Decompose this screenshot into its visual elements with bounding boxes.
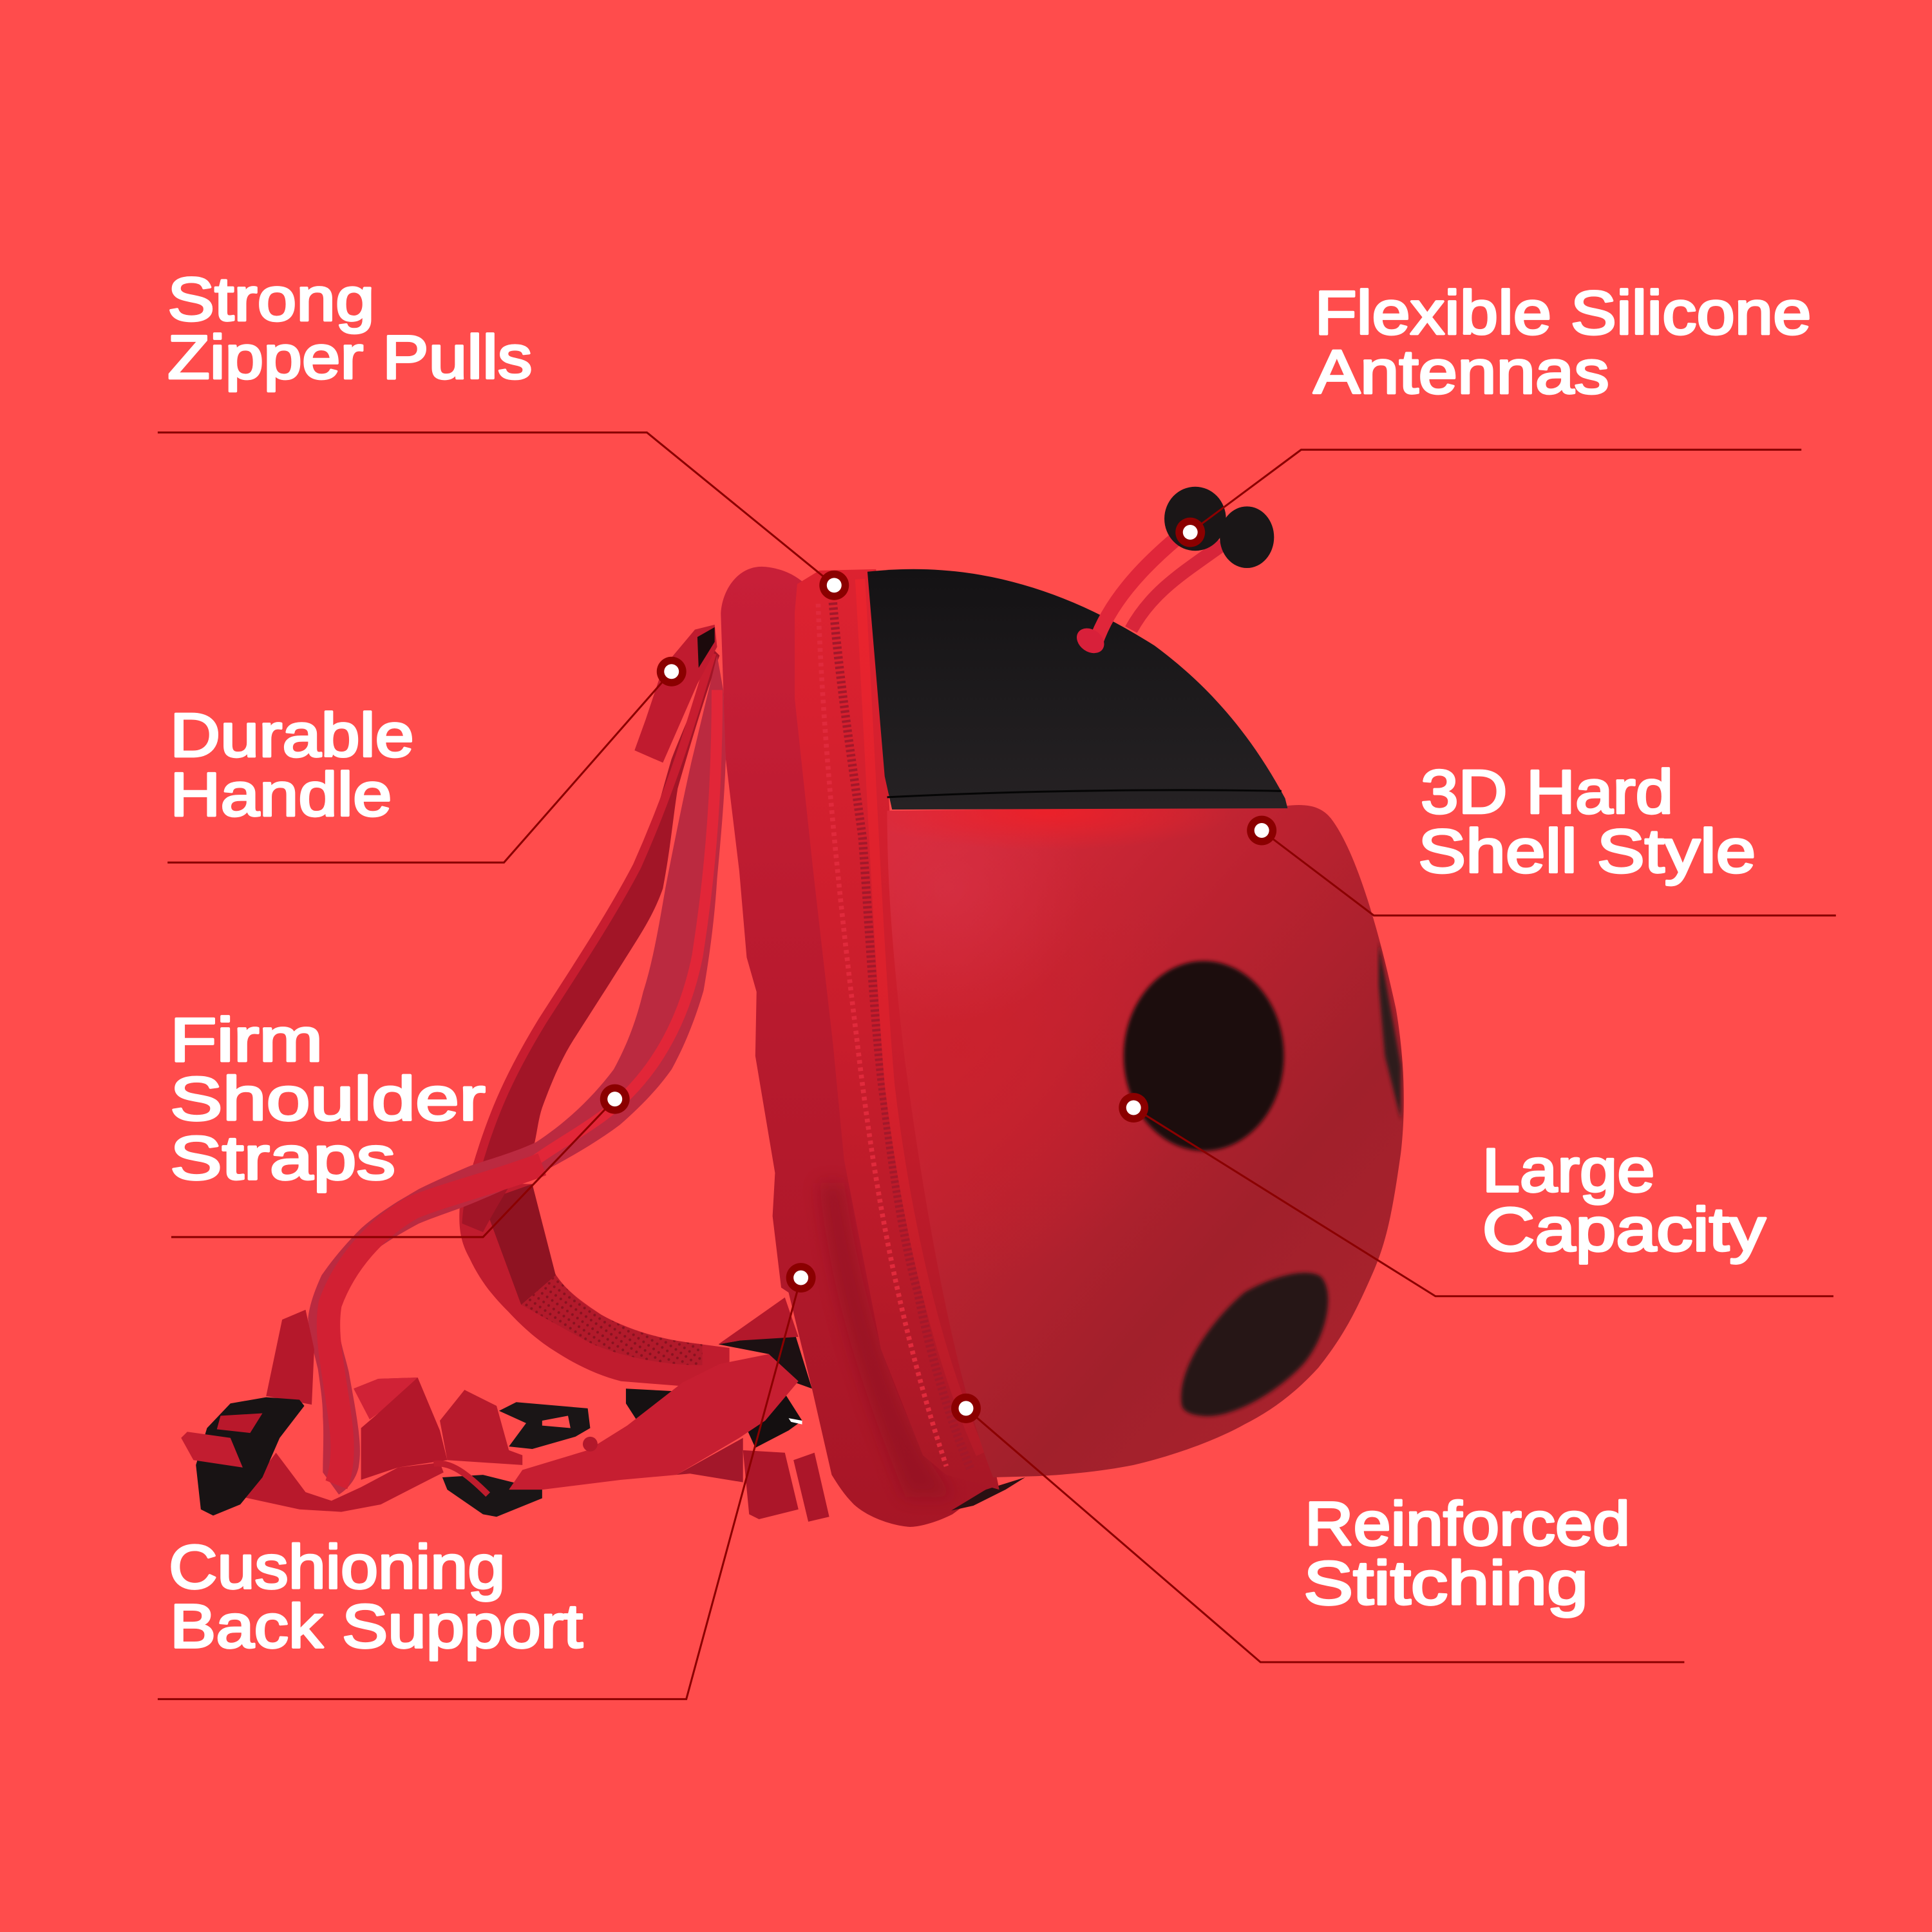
- leader line: cushioning back support: [158, 1278, 801, 1699]
- left buckle: [181, 1397, 305, 1515]
- marker: stitching: [951, 1394, 981, 1423]
- bottom buckle: [433, 1463, 542, 1517]
- label: Reinforced Stitching: [1303, 1490, 1630, 1618]
- diagonal lower strap: [509, 1354, 799, 1490]
- label: Reinforced Stitching: Stitching: [1303, 1549, 1588, 1618]
- label: Large Capacity: [1482, 1136, 1766, 1264]
- dark hardware behind strap: [626, 1333, 812, 1421]
- leader line: strong zipper pulls: [158, 433, 834, 585]
- rear strap outer: [462, 650, 719, 1232]
- marker: shoulder straps: [600, 1084, 630, 1114]
- label: 3D Hard Shell Style: Shell Style: [1418, 817, 1756, 886]
- label: Durable Handle: [170, 701, 414, 829]
- label: Flexible Silicone Antennas: Flexible Silicone: [1314, 278, 1811, 347]
- backpack illustration: [181, 487, 1417, 1527]
- marker: back support: [786, 1263, 816, 1293]
- hanging straps and rear buckle: [718, 1298, 829, 1522]
- spot: middle: [1124, 961, 1284, 1151]
- label: Strong Zipper Pulls: Zipper Pulls: [167, 323, 533, 392]
- label: Large Capacity: Capacity: [1482, 1195, 1766, 1264]
- leader line: firm shoulder straps: [171, 1099, 615, 1237]
- label: Large Capacity: Large: [1482, 1136, 1655, 1205]
- label: Strong Zipper Pulls: [167, 265, 533, 392]
- marker: antennas: [1175, 518, 1205, 547]
- marker: handle: [657, 657, 687, 687]
- leader line: large capacity: [1133, 1108, 1833, 1296]
- label: Strong Zipper Pulls: Strong: [167, 265, 375, 334]
- black shell top: [867, 569, 1287, 810]
- label: 3D Hard Shell Style: 3D Hard: [1421, 758, 1673, 827]
- front loop strap: [308, 656, 726, 1495]
- marker: capacity: [1119, 1093, 1148, 1122]
- label: Firm Shoulder Straps: Shoulder: [170, 1065, 486, 1133]
- handle: [634, 625, 717, 762]
- label: Cushioning Back Support: Cushioning: [169, 1533, 505, 1602]
- label: Cushioning Back Support: [169, 1533, 583, 1661]
- shoulder pad with mesh: [459, 1183, 730, 1390]
- label: Durable Handle: Durable: [170, 701, 414, 770]
- label: Firm Shoulder Straps: [170, 1005, 486, 1193]
- spot: lower: [1181, 1273, 1328, 1416]
- leader line: flexible silicone antennas: [1190, 450, 1801, 533]
- label: Durable Handle: Handle: [170, 761, 392, 829]
- small side-release buckle: [499, 1402, 590, 1449]
- label: Flexible Silicone Antennas: [1314, 278, 1811, 406]
- red lower shell: [887, 805, 1404, 1477]
- marker: zipper pulls: [819, 571, 849, 600]
- leader line: durable handle: [167, 672, 672, 862]
- label: 3D Hard Shell Style: [1418, 758, 1756, 886]
- label: Firm Shoulder Straps: Straps: [170, 1124, 395, 1193]
- label: Firm Shoulder Straps: Firm: [170, 1005, 323, 1074]
- zipper tape: [795, 569, 999, 1490]
- leader line: 3D hard shell style: [1262, 831, 1836, 916]
- antennas: [1072, 487, 1274, 658]
- marker: hard shell: [1247, 816, 1276, 845]
- label: Flexible Silicone Antennas: Antennas: [1314, 337, 1609, 406]
- lower left webbing: [243, 1310, 522, 1512]
- label: Cushioning Back Support: Back Support: [170, 1592, 583, 1661]
- leader line: reinforced stitching: [966, 1408, 1684, 1662]
- padded back panel: [721, 567, 1025, 1527]
- label: Reinforced Stitching: Reinforced: [1305, 1490, 1630, 1558]
